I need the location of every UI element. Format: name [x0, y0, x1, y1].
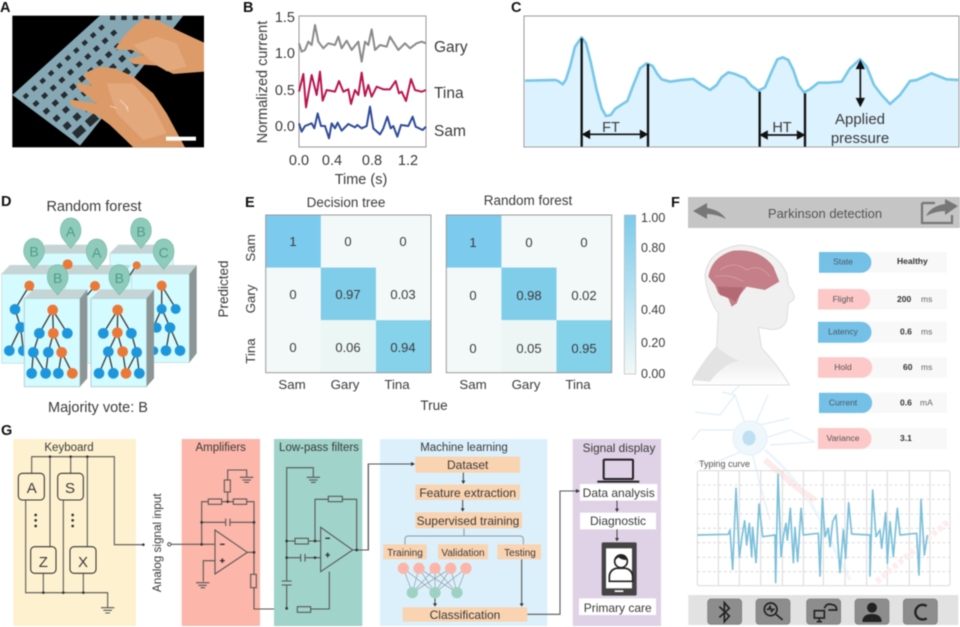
row: Variance: Variance [827, 433, 860, 443]
matrix: decision tree: 0 [289, 287, 297, 302]
y-axis title: Normalized current [255, 21, 271, 143]
head silhouette with brain [693, 245, 794, 385]
block: Amplifiers [168, 439, 297, 626]
FT label: FT [602, 120, 620, 136]
title: Decision tree: Decision tree [307, 195, 385, 210]
block: Keyboard [13, 439, 145, 626]
typing curve chart [697, 471, 950, 586]
row labels: Sam [243, 234, 258, 262]
block: Amplifiers: Amplifiers [195, 442, 246, 454]
row labels [243, 234, 258, 364]
row labels: Tina [243, 338, 258, 364]
matrix: decision tree: 0.03 [390, 287, 416, 302]
block: Low-pass filters [274, 439, 368, 626]
matrix: random forest: 0.98 [516, 288, 542, 303]
metric rows [818, 252, 947, 449]
panel label D: D [1, 194, 11, 210]
panel D: random forest trees in 3D boxes: C [159, 244, 169, 260]
block: Machine learning: Testing [504, 548, 536, 559]
panel label F: F [671, 195, 680, 211]
row: Current: Current [829, 398, 858, 408]
arrow: classification to data analysis [527, 489, 580, 614]
block: Low-pass filters: Low-pass filters [279, 442, 359, 454]
panel E: confusion matrices [216, 193, 665, 413]
row: State [819, 252, 947, 273]
row labels: Gary [243, 284, 258, 313]
block: Machine learning: Dataset [447, 458, 489, 472]
app header bar [688, 197, 960, 228]
x-axis ticks: 1.2 [398, 153, 418, 169]
row: State: State [833, 256, 853, 266]
series labels: Tina [434, 85, 464, 102]
colour bar: 0.00 [641, 367, 665, 381]
series labels: Gary [434, 39, 468, 56]
matrix: random forest: 1 [469, 235, 477, 250]
arrow: low-pass to dataset [360, 462, 415, 550]
y-axis ticks: 1.5 [275, 10, 295, 26]
y-axis ticks [275, 10, 295, 135]
row: Current: 0.6 [900, 398, 912, 408]
majority vote caption: Majority vote: B [48, 400, 148, 416]
panel label G: G [1, 423, 12, 439]
front tree box 2 [91, 289, 154, 387]
column labels: Gary [331, 377, 360, 392]
panel D: random forest trees in 3D boxes: A [92, 244, 102, 260]
panel D: random forest trees in 3D boxes: A [66, 223, 76, 239]
block: Signal display: Signal display [583, 441, 655, 455]
icon: magnifier [764, 603, 783, 620]
x-axis title: Time (s) [335, 172, 387, 188]
row: Flight: 200 [897, 294, 911, 304]
row: Latency: 0.6 [900, 326, 912, 336]
app header bar: Parkinson detection [768, 206, 882, 221]
block: Machine learning: Classification [430, 608, 500, 622]
trace: Sam [299, 107, 426, 138]
panel D: random forest trees in 3D boxes: B [53, 270, 62, 286]
laptop icon [597, 460, 639, 483]
label: Analog signal input: Analog signal input [151, 493, 164, 592]
icon: bluetooth [719, 603, 729, 622]
panel B: normalized current line chart [255, 10, 468, 188]
block: Keyboard: S [65, 480, 75, 497]
block: Keyboard: Keyboard [44, 442, 94, 454]
front tree box 1 [24, 289, 87, 387]
matrix: decision tree: 0 [399, 234, 407, 249]
block: Signal display [573, 439, 661, 626]
matrix: decision tree: 0.06 [335, 340, 361, 355]
matrix: decision tree [266, 215, 431, 373]
x-axis ticks: 0.4 [322, 153, 342, 169]
block: Machine learning: Machine learning [420, 442, 508, 454]
applied pressure label: Applied [835, 111, 885, 128]
icon: refresh [915, 605, 927, 619]
row: Current [819, 393, 947, 413]
row: Flight: ms [921, 294, 932, 304]
panel label A: A [0, 0, 11, 16]
matrix: random forest: 0.02 [571, 288, 597, 303]
matrix: random forest [446, 215, 612, 373]
panel label E: E [245, 195, 255, 211]
x-axis ticks: 0.0 [289, 153, 309, 169]
matrix: decision tree: 0.94 [390, 340, 416, 355]
row: Hold: Hold [834, 362, 852, 372]
vote balloons [24, 218, 174, 295]
block: Machine learning: Supervised training [417, 514, 519, 528]
matrix: random forest: 0 [525, 235, 533, 250]
colour bar: 0.20 [641, 336, 665, 350]
trace: Tina [299, 72, 426, 107]
y-axis ticks: 1.0 [275, 46, 295, 62]
row: Latency [818, 322, 947, 343]
panel D: random forest trees in 3D boxes: B [136, 223, 146, 239]
app toolbar [688, 595, 958, 625]
row: Current: mA [920, 398, 933, 408]
row: Variance [818, 428, 947, 449]
matrix: random forest: 0 [580, 235, 588, 250]
colour bar: 0.40 [641, 303, 665, 317]
y-axis ticks: 0.0 [275, 119, 295, 135]
panel D title: Random forest [46, 199, 142, 215]
block: Keyboard: A [27, 480, 37, 497]
colour bar: 1.00 [641, 211, 665, 225]
axis label Predicted: Predicted [216, 260, 231, 318]
block: Signal display: Diagnostic [590, 514, 646, 528]
panel D: random forest trees in 3D boxes: B [115, 270, 124, 286]
icon: doctor [862, 603, 882, 622]
scale bar [166, 137, 196, 141]
tablet icon with doctor [602, 542, 637, 596]
panel label B: B [243, 0, 253, 16]
row: Variance: 3.1 [900, 433, 912, 443]
panel D: random forest trees in 3D boxes: B [29, 244, 39, 260]
block: Machine learning [380, 439, 547, 626]
matrix: decision tree: 1 [289, 234, 297, 249]
matrix: random forest: 0 [469, 288, 477, 303]
panel D: random forest trees in 3D boxes [2, 218, 197, 387]
HT label: HT [772, 120, 792, 136]
block: Machine learning: Training [387, 548, 423, 559]
axis label True: True [420, 398, 448, 413]
block: Machine learning: Feature extraction [419, 486, 516, 500]
column labels: Sam [459, 377, 487, 392]
x-axis ticks [289, 153, 418, 169]
icon: cloud and monitor [814, 604, 837, 622]
series labels: Sam [434, 123, 466, 140]
row: Latency: ms [921, 326, 932, 336]
column labels: Tina [565, 377, 591, 392]
matrix: decision tree: 0 [344, 234, 352, 249]
row: Hold: ms [921, 362, 932, 372]
row: Flight [818, 289, 947, 310]
block: Signal display: Data analysis [583, 486, 655, 500]
column labels: Sam [278, 377, 306, 392]
panel G: signal processing pipeline [13, 439, 661, 626]
panel label C: C [511, 0, 522, 16]
colour bar [624, 211, 665, 381]
matrix: random forest: 0 [469, 341, 477, 356]
block: Signal display: Primary care [584, 601, 652, 615]
colour bar: 0.60 [641, 271, 665, 285]
block: Machine learning: Validation [441, 548, 485, 559]
row: State: Healthy [897, 256, 928, 266]
panel F: Parkinson detection app [688, 197, 960, 625]
row: Hold: 60 [903, 362, 913, 372]
y-axis ticks: 0.5 [275, 83, 295, 99]
colour bar: 0.80 [641, 241, 665, 255]
matrix: random forest: 0.05 [516, 341, 542, 356]
panel A: photo of hands typing on keyboard [12, 16, 204, 147]
column labels: Tina [384, 377, 410, 392]
block: Keyboard: X [78, 554, 88, 571]
column labels: Gary [512, 377, 541, 392]
trace: Gary [299, 25, 426, 62]
matrix: decision tree: 0.97 [335, 287, 361, 302]
matrix: decision tree: 0 [289, 340, 297, 355]
matrix: random forest: 0.95 [571, 341, 597, 356]
series labels [434, 39, 468, 140]
x-axis ticks: 0.8 [362, 153, 382, 169]
typing curve label: Typing curve [699, 459, 750, 469]
row: Hold [818, 357, 947, 378]
applied pressure label line 2: pressure [831, 130, 889, 147]
panel C: pressure waveform with FT and HT annotations [524, 16, 959, 147]
column labels [278, 377, 591, 392]
block: Keyboard: Z [39, 554, 48, 571]
row: Flight: Flight [833, 294, 854, 304]
row: Latency: Latency [828, 326, 859, 336]
neuron illustration [692, 380, 850, 580]
title: Random forest: Random forest [484, 193, 573, 208]
